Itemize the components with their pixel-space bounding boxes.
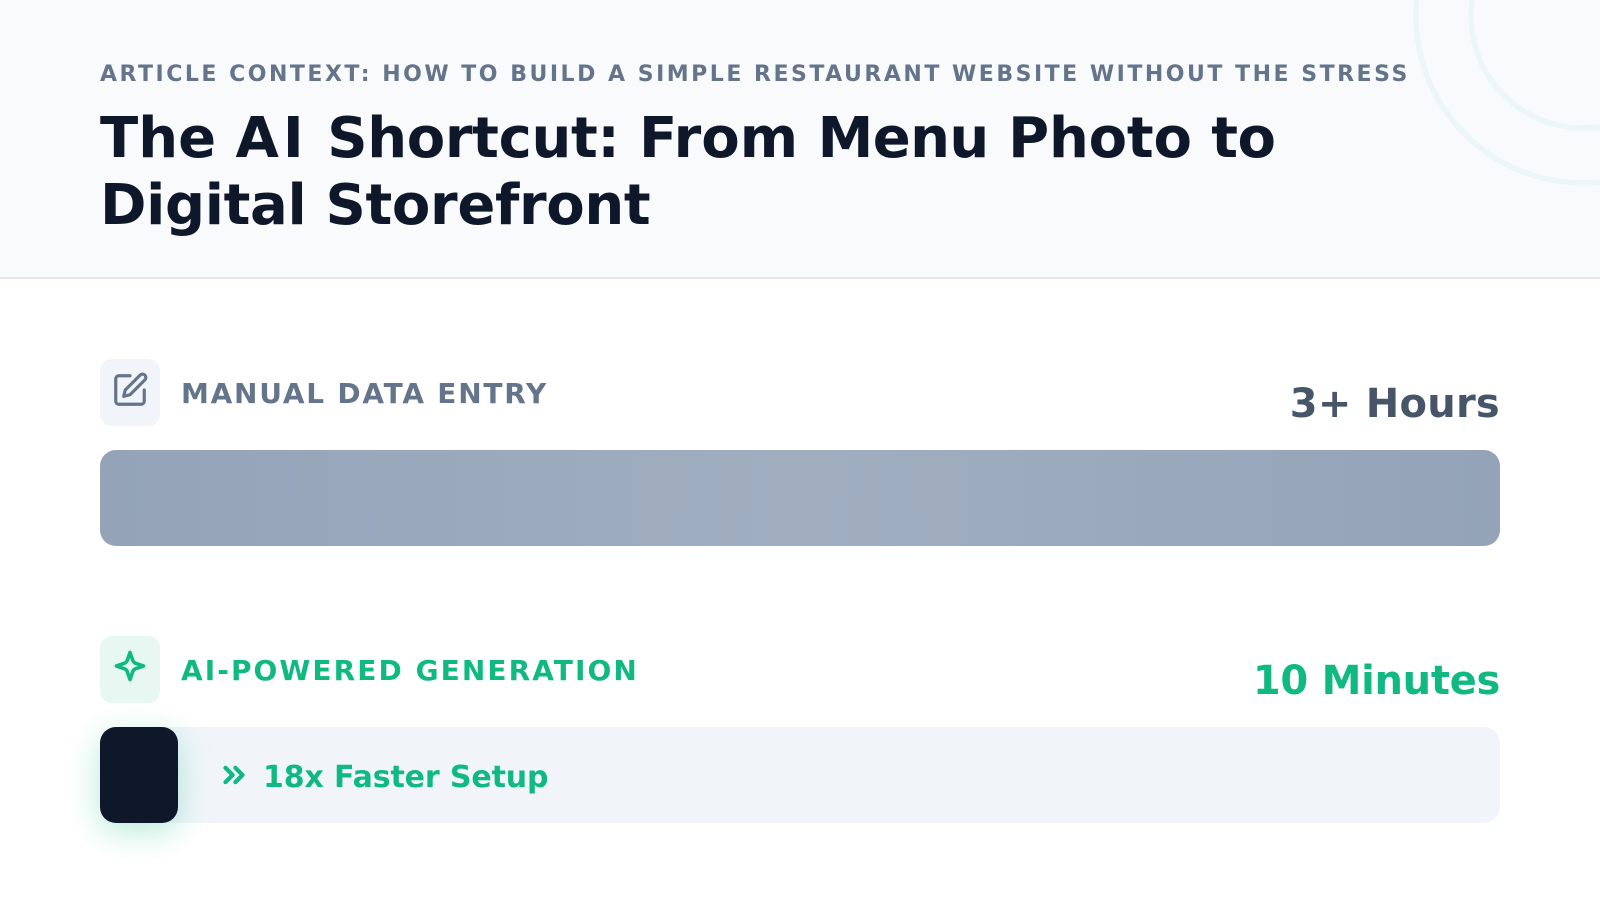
icon: pencil on square (100, 359, 160, 426)
title: The AI Shortcut: From Menu Photo to (100, 106, 1276, 171)
panel: AI-powered generation (81, 636, 1500, 850)
bar track (100, 727, 1500, 823)
bar fill: AI (100, 727, 178, 823)
value: 3+ hours: 3+ Hours (1290, 381, 1500, 427)
icon: sparkle (100, 636, 160, 703)
eyebrow text: ARTICLE CONTEXT: HOW TO BUILD A SIMPLE RESTAURANT WEBSITE WITHOUT THE STRESS (100, 62, 1410, 87)
panel: manual data entry (100, 359, 1500, 546)
icon: double chevron (223, 766, 245, 784)
title: Digital Storefront (100, 173, 650, 238)
label: manual data entry: MANUAL DATA ENTRY (181, 377, 548, 410)
callout: 18x faster setup: 18x Faster Setup (263, 760, 548, 795)
bar: manual (100, 450, 1500, 546)
label: AI-powered generation: AI-POWERED GENERATION (181, 654, 639, 687)
panel: header (0, 0, 1600, 279)
value: 10 minutes: 10 Minutes (1253, 658, 1500, 704)
decorative concentric circles (1414, 0, 1600, 186)
title (100, 106, 1276, 238)
